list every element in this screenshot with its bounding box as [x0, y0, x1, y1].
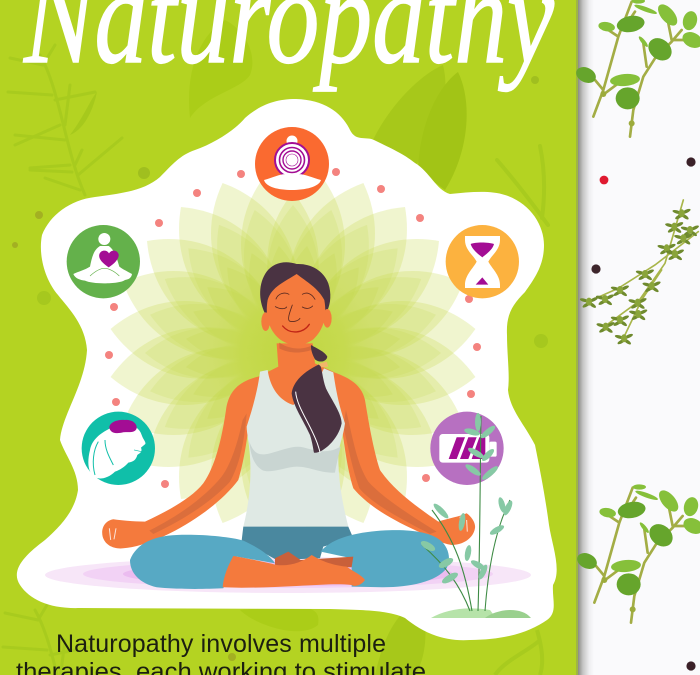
legs — [130, 535, 275, 589]
body text — [16, 630, 426, 675]
icon: heart meditation — [67, 225, 140, 298]
face — [267, 274, 325, 345]
white blob panel — [17, 99, 557, 640]
icon: chakra meditation — [255, 127, 329, 201]
oregano sprig bottom — [575, 484, 700, 623]
icon: brain profile — [82, 412, 155, 485]
herbs and peppercorns on the table — [574, 0, 700, 671]
peppercorns — [686, 157, 696, 167]
arm shadows — [149, 413, 247, 534]
icon: battery — [430, 412, 504, 485]
plant — [419, 413, 531, 618]
ponytail — [292, 364, 342, 453]
ponytail tie and stub — [311, 345, 327, 362]
oregano sprig top — [574, 0, 700, 137]
back hair — [260, 262, 330, 313]
neck shadow — [279, 343, 313, 352]
shorts — [242, 527, 353, 560]
thyme sprig — [579, 200, 700, 345]
ground mounds — [431, 608, 496, 618]
background herbs — [3, 20, 548, 675]
lotus flower petals — [106, 166, 480, 540]
panel shadow — [578, 0, 594, 675]
hand details — [109, 517, 467, 540]
foot shadow — [275, 552, 353, 567]
tank top — [243, 368, 348, 527]
icon: hourglass — [446, 225, 519, 298]
woman meditating — [102, 262, 475, 589]
top shadow band — [249, 442, 341, 473]
decorative dots — [105, 168, 481, 488]
mat — [45, 557, 531, 593]
body text: Naturopathy involves multiple — [56, 630, 386, 658]
ears — [261, 312, 270, 331]
facial features — [275, 293, 315, 332]
white wood background — [577, 0, 700, 675]
arms and torso skin — [102, 343, 475, 548]
feet — [223, 555, 365, 588]
